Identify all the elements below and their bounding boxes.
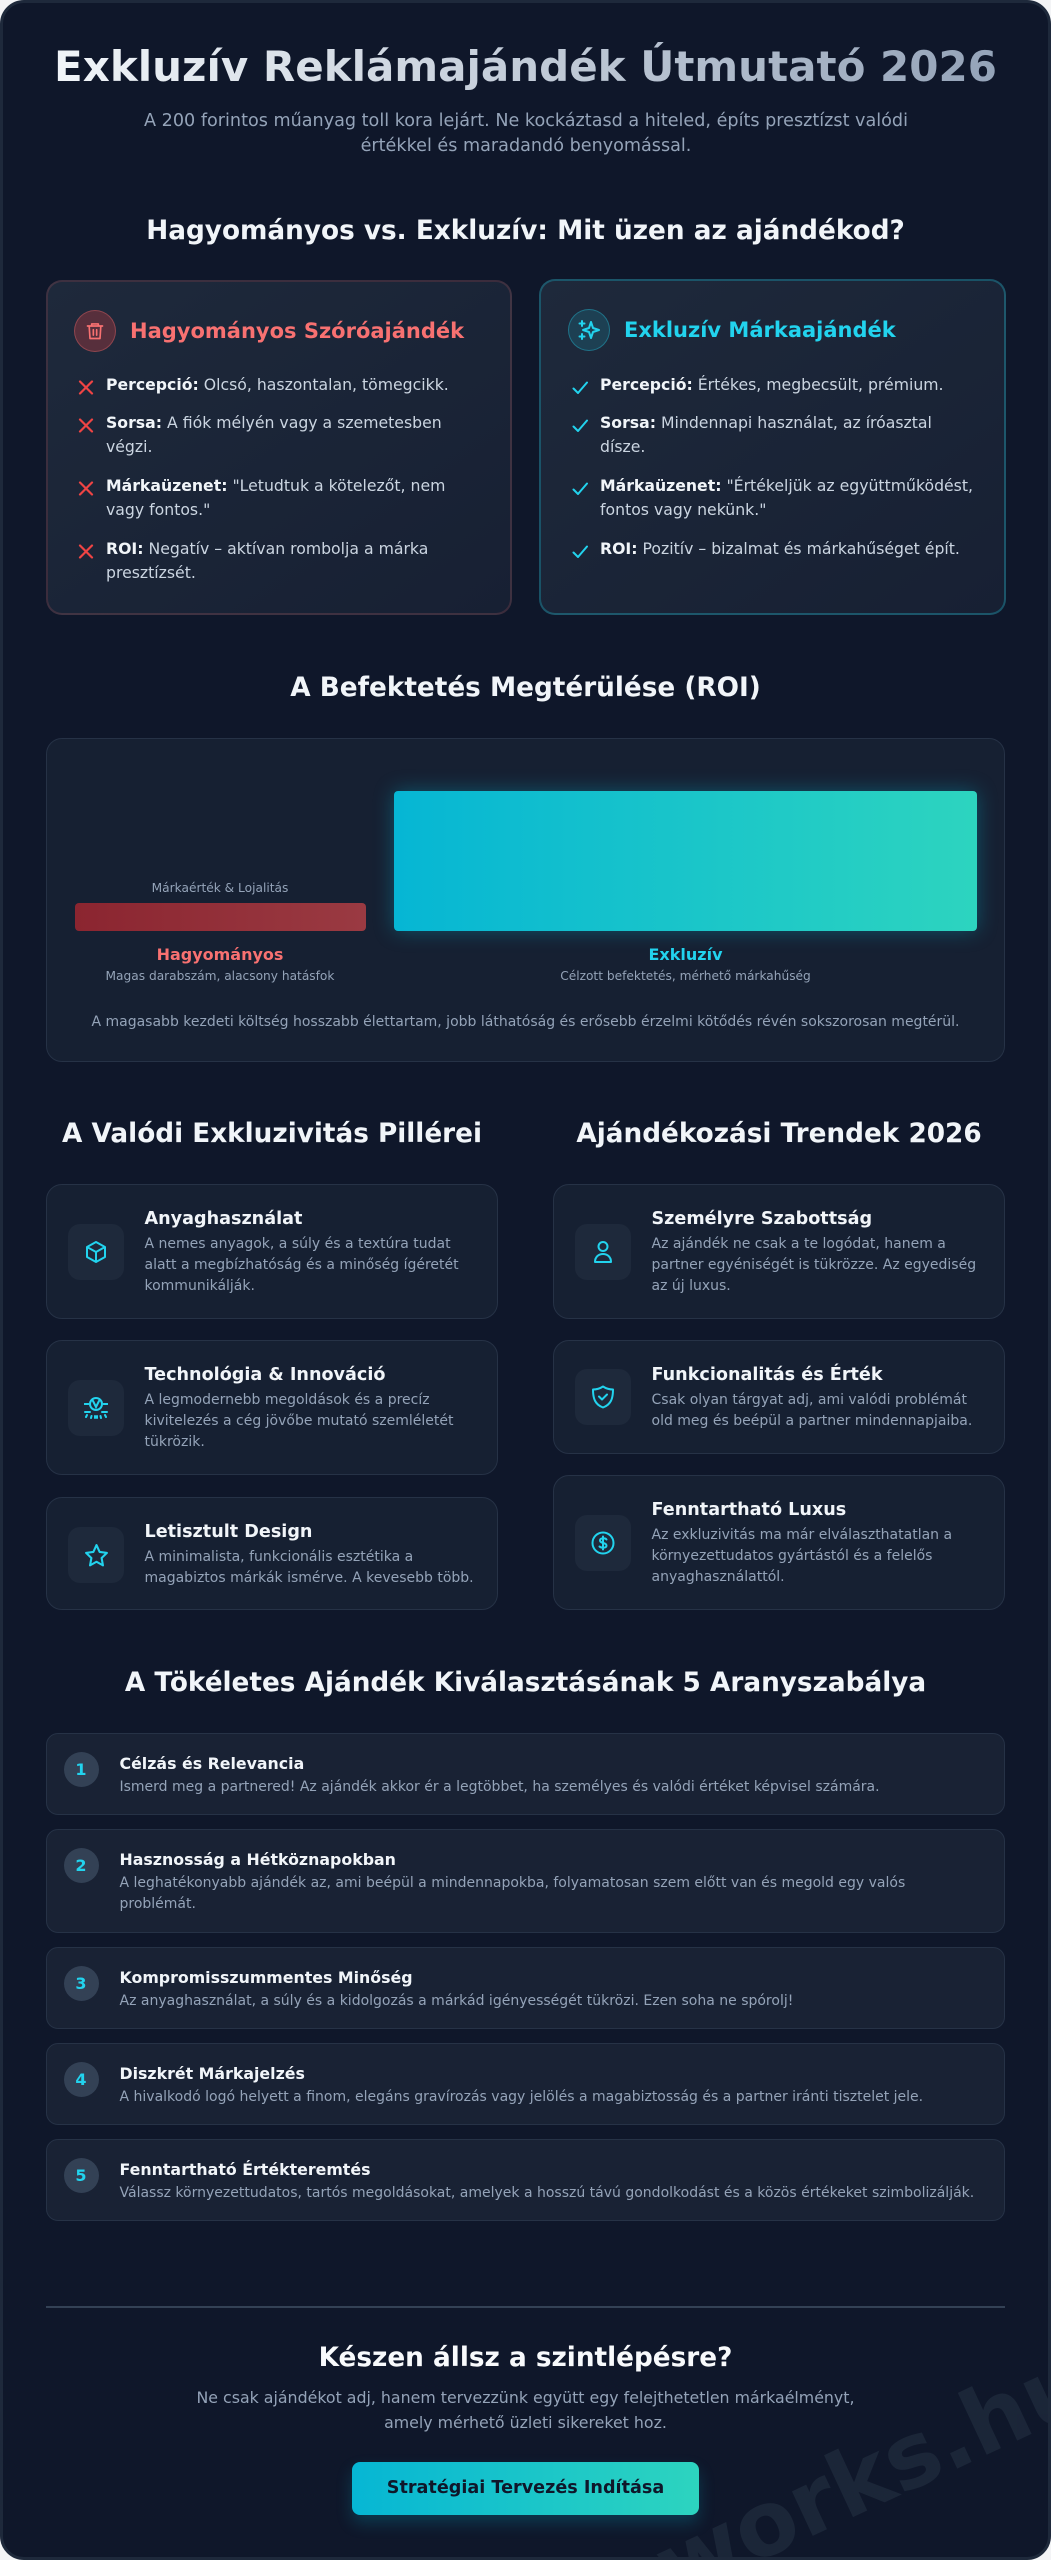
pillar text: kommunikálják.	[144, 1278, 255, 1294]
icon: coin	[575, 1515, 631, 1571]
caption: traditional: Magas darabszám, alacsony hatásfok	[106, 969, 334, 983]
panel: traditional gifts	[46, 280, 512, 615]
trend title: Fenntartható Luxus	[652, 1500, 846, 1520]
pillar text: A nemes anyagok, a súly és a textúra tudat	[144, 1236, 451, 1252]
rule 3	[46, 1947, 1005, 2029]
cta heading: Készen állsz a szintlépésre?	[319, 2343, 732, 2373]
trend: personalization	[553, 1184, 1005, 1319]
pillar text	[144, 1392, 454, 1450]
trend text: old meg és beépül a partner mindennapjaiba.	[652, 1413, 972, 1429]
item: brand message: Márkaüzenet: "Letudtuk a kötelezőt, nem	[106, 476, 445, 494]
pillar text: A legmodernebb megoldások és a precíz	[144, 1392, 430, 1408]
heading: comparison: Hagyományos vs. Exkluzív: Mit üzen az ajándékod?	[146, 216, 905, 246]
heading: golden rules: A Tökéletes Ajándék Kiválasztásának 5 Aranyszabálya	[125, 1668, 926, 1698]
item: perception: Percepció: Olcsó, haszontalan, tömegcikk.	[106, 374, 449, 394]
heading: roi: A Befektetés Megtérülése (ROI)	[290, 672, 761, 702]
item: roi: presztízsét.	[106, 563, 196, 582]
panel: roi chart	[46, 738, 1005, 1062]
icon: trash	[74, 310, 116, 352]
pillar text: tükrözik.	[144, 1434, 205, 1450]
rule 5	[46, 2139, 1005, 2221]
panel: exclusive gifts	[539, 279, 1006, 615]
card title: Hagyományos Szóróajándék	[130, 319, 464, 343]
pillar: technology	[46, 1340, 498, 1475]
pillar text	[144, 1236, 459, 1294]
pillar: design	[46, 1497, 498, 1610]
trend: sustainability	[553, 1475, 1005, 1610]
item: brand message: vagy fontos."	[106, 500, 210, 519]
subtitle	[144, 111, 908, 156]
label: traditional: Hagyományos	[157, 944, 283, 964]
trend text: Az ajándék ne csak a te logódat, hanem a	[652, 1236, 946, 1252]
pillar title: Anyaghasználat	[144, 1208, 302, 1228]
trend text	[652, 1527, 952, 1585]
cta text	[196, 2388, 854, 2432]
icon: sparkles	[568, 309, 610, 351]
rule title: Hasznosság a Hétköznapokban	[120, 1850, 396, 1869]
trend text	[652, 1236, 976, 1294]
title: Exkluzív Reklámajándék Útmutató 2026	[54, 42, 997, 91]
item: brand message: Márkaüzenet: "Értékeljük az együttműködést,	[600, 476, 973, 494]
number badge: 5	[75, 2166, 87, 2185]
pillar: materials	[46, 1184, 498, 1319]
rule 2	[46, 1829, 1005, 1933]
number badge: 1	[75, 1760, 87, 1779]
number badge	[64, 2062, 98, 2097]
item: fate: Sorsa: Mindennapi használat, az íróasztal	[600, 412, 932, 432]
trend text: környezettudatos gyártástól és a felelős	[652, 1548, 932, 1564]
rule title: Célzás és Relevancia	[120, 1754, 304, 1773]
rule text: Válassz környezettudatos, tartós megoldásokat, amelyek a hosszú távú gondolkodást és a közös értékeket szimbolizálják.	[120, 2184, 974, 2200]
number badge: 2	[75, 1856, 87, 1875]
number badge	[64, 1966, 98, 2001]
rule text: Ismerd meg a partnered! Az ajándék akkor ér a legtöbbet, ha személyes és valódi értéket képvisel számára.	[120, 1778, 880, 1794]
heading: pillars: A Valódi Exkluzivitás Pillérei	[62, 1118, 482, 1148]
cta text: amely mérhető üzleti sikereket hoz.	[384, 2413, 667, 2432]
number badge	[64, 2158, 98, 2193]
item: fate	[78, 412, 442, 456]
item: roi	[78, 538, 428, 582]
item: fate: végzi.	[106, 437, 152, 456]
card title: Exkluzív Márkaajándék	[624, 318, 896, 342]
rule title: Diszkrét Márkajelzés	[120, 2064, 305, 2083]
pillar text: A minimalista, funkcionális esztétika a	[144, 1549, 413, 1565]
trend text: Csak olyan tárgyat adj, ami valódi problémát	[652, 1392, 967, 1408]
icon: person	[575, 1224, 631, 1280]
number badge	[64, 1752, 98, 1787]
cta text: Ne csak ajándékot adj, hanem tervezzünk együtt egy felejthetetlen márkaélményt,	[196, 2388, 854, 2407]
cta button: Stratégiai Tervezés Indítása	[387, 2478, 664, 2498]
trend text: az új luxus.	[652, 1278, 731, 1294]
subtitle: értékkel és maradandó benyomással.	[361, 136, 691, 156]
trend text: Az exkluzivitás ma már elválaszthatatlan a	[652, 1527, 952, 1543]
heading: trends: Ajándékozási Trendek 2026	[576, 1118, 982, 1148]
bar: exclusive	[394, 791, 977, 931]
item: brand message	[78, 476, 445, 519]
rule text: A hivalkodó logó helyett a finom, elegáns gravírozás vagy jelölés a magabiztosság és a partner iránti tisztelet jele.	[120, 2088, 923, 2104]
icon: star	[68, 1527, 124, 1583]
pillar text: magabiztos márkák ismérve. A kevesebb több.	[144, 1570, 474, 1586]
rule 1	[46, 1733, 1005, 1815]
pillar text	[144, 1549, 474, 1586]
item: brand message: fontos vagy nekünk."	[600, 500, 766, 519]
trend text: anyaghasználattól.	[652, 1569, 785, 1585]
number badge: 4	[75, 2070, 87, 2089]
subtitle: A 200 forintos műanyag toll kora lejárt. Ne kockáztasd a hiteled, építs presztízst valódi	[144, 111, 908, 131]
rule text	[120, 1874, 905, 1912]
trend title: Személyre Szabottság	[652, 1208, 872, 1228]
item: brand message	[572, 476, 973, 519]
chart note: A magasabb kezdeti költség hosszabb élettartam, jobb láthatóság és erősebb érzelmi kötődés révén sokszorosan megtérül.	[91, 1014, 960, 1030]
icon: shield check	[575, 1369, 631, 1425]
trend text	[652, 1392, 972, 1429]
item: fate: dísze.	[600, 437, 645, 456]
trend title: Funkcionalitás és Érték	[652, 1364, 883, 1384]
rule title: Kompromisszummentes Minőség	[120, 1968, 413, 1987]
trend text: partner egyéniségét is tükrözze. Az egyediség	[652, 1257, 976, 1273]
item: fate: Sorsa: A fiók mélyén vagy a szemetesben	[106, 412, 442, 432]
pillar text: kivitelezés a cég jövőbe mutató szemléletét	[144, 1413, 454, 1429]
rule text: problémát.	[120, 1896, 196, 1912]
bar label: brand value: Márkaérték & Lojalitás	[152, 881, 288, 895]
cta button	[352, 2462, 699, 2515]
number badge	[64, 1848, 98, 1883]
rule title: Fenntartható Értékteremtés	[120, 2160, 370, 2179]
pillar title: Letisztult Design	[144, 1522, 312, 1542]
pillar text: alatt a megbízhatóság és a minőség ígéretét	[144, 1257, 459, 1273]
item: roi: ROI: Negatív – aktívan rombolja a márka	[106, 538, 428, 558]
number badge: 3	[75, 1974, 87, 1993]
label: exclusive: Exkluzív	[648, 944, 722, 964]
rule text: Az anyaghasználat, a súly és a kidolgozás a márkád igényességét tükrözi. Ezen soha ne spórolj!	[120, 1992, 793, 2008]
caption: exclusive: Célzott befektetés, mérhető márkahűség	[560, 969, 811, 983]
item: fate	[572, 412, 932, 456]
bar: traditional	[75, 903, 366, 931]
icon: cube	[68, 1224, 124, 1280]
item: roi: ROI: Pozitív – bizalmat és márkahűséget épít.	[600, 538, 960, 558]
icon: chip	[68, 1380, 124, 1436]
trend: functionality	[553, 1340, 1005, 1454]
rule text: A leghatékonyabb ajándék az, ami beépül a mindennapokba, folyamatosan szem előtt van és megold egy valós	[120, 1874, 905, 1890]
rule 4	[46, 2043, 1005, 2125]
pillar title: Technológia & Innováció	[144, 1364, 385, 1384]
item: perception: Percepció: Értékes, megbecsült, prémium.	[600, 374, 944, 394]
